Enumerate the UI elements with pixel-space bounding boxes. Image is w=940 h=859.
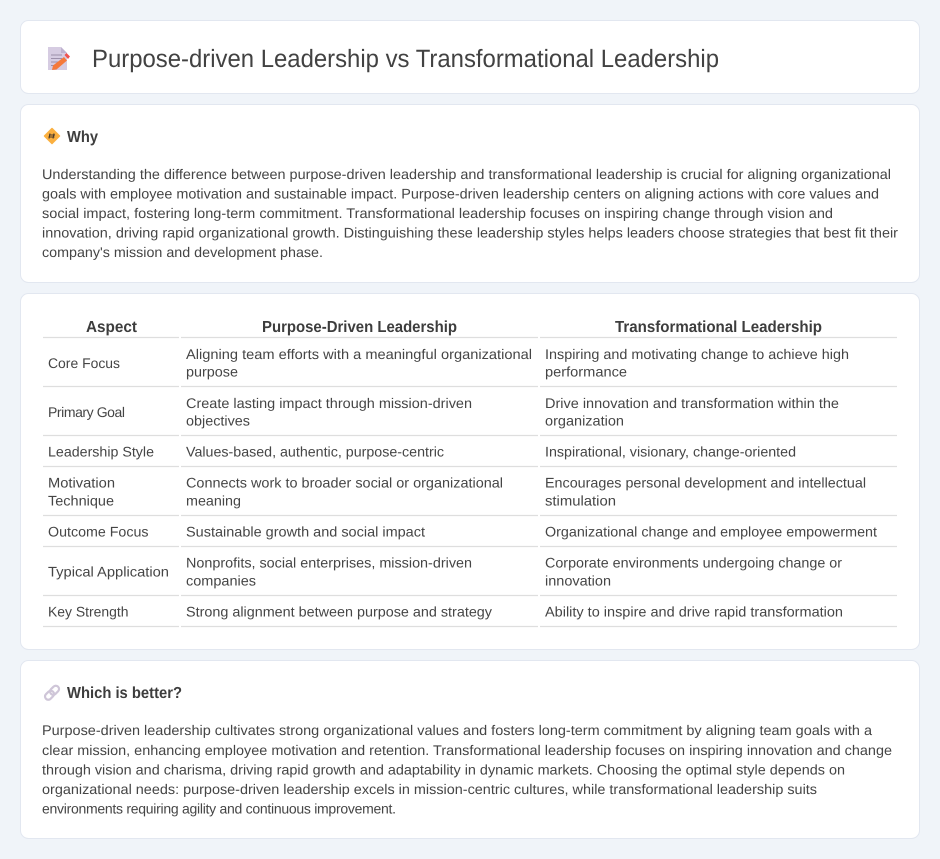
text block: why paragraph xyxy=(42,166,898,260)
row: leadership style: Leadership Style xyxy=(48,444,154,460)
icon: document with pencil xyxy=(48,47,70,70)
text block: which is better paragraph: environments requiring agility and continuous improvement. xyxy=(42,800,396,816)
text block: why paragraph: social impact, fostering long-term commitment. Transformational leadership focuses on inspiring change through vision and xyxy=(42,205,833,221)
row: motivation technique: Motivation xyxy=(48,475,115,491)
text block: which is better paragraph: Purpose-driven leadership cultivates strong organizational values and fosters long-term commitment by aligning team goals with a xyxy=(42,722,872,738)
panel: which is better xyxy=(20,660,920,838)
text block: why paragraph: company's mission and development phase. xyxy=(42,244,323,260)
row: typical application: Nonprofits, social enterprises, mission-driven xyxy=(186,555,472,571)
row: core focus: Aligning team efforts with a meaningful organizational xyxy=(186,346,532,362)
row: key strength: Strong alignment between purpose and strategy xyxy=(186,604,492,620)
text block: why paragraph: innovation, driving rapid organizational growth. Distinguishing these leadership styles helps leaders choose strategies that best fit their xyxy=(42,224,898,240)
row: typical application: innovation xyxy=(545,572,611,588)
row: primary goal: organization xyxy=(545,413,624,429)
text block: which is better paragraph: through vision and charisma, driving rapid growth and adaptability in dynamic markets. Choosing the optimal style depends on xyxy=(42,762,845,778)
row: typical application xyxy=(43,555,897,596)
panel: header xyxy=(20,20,920,94)
text block: why paragraph: Understanding the difference between purpose-driven leadership and transformational leadership is crucial for aligning organizational xyxy=(42,166,891,182)
icon: chain link xyxy=(44,684,60,701)
title: Purpose-driven Leadership vs Transformational Leadership xyxy=(92,45,719,73)
row: key strength: Key Strength xyxy=(48,604,128,620)
row: core focus: Inspiring and motivating change to achieve high xyxy=(545,346,849,362)
row: motivation technique: stimulation xyxy=(545,492,616,508)
table header row xyxy=(43,319,897,338)
row: motivation technique: Technique xyxy=(48,492,114,508)
row: outcome focus: Outcome Focus xyxy=(48,524,148,540)
text block: which is better paragraph xyxy=(42,722,892,816)
icon: orange diamond sign xyxy=(44,128,60,144)
row: leadership style: Values-based, authentic, purpose-centric xyxy=(186,444,444,460)
text block: which is better paragraph: organizational needs: purpose-driven leadership excels in mission-centric cultures, while transformational leadership suits xyxy=(42,781,817,797)
row: outcome focus: Sustainable growth and social impact xyxy=(186,524,425,540)
table header row: Aspect xyxy=(86,319,138,336)
row: motivation technique: Encourages personal development and intellectual xyxy=(545,475,866,491)
row: typical application: Corporate environments undergoing change or xyxy=(545,555,842,571)
row: primary goal: Create lasting impact through mission-driven xyxy=(186,395,472,411)
row: leadership style: Inspirational, visionary, change-oriented xyxy=(545,444,796,460)
heading: which is better: Which is better? xyxy=(67,685,182,702)
panel: comparison table xyxy=(20,294,920,650)
row: primary goal xyxy=(43,395,897,436)
row: key strength: Ability to inspire and drive rapid transformation xyxy=(545,604,843,620)
table header row: Purpose-Driven Leadership xyxy=(262,319,457,336)
row: key strength xyxy=(43,604,897,626)
heading: why: Why xyxy=(67,129,98,146)
row: primary goal: Drive innovation and transformation within the xyxy=(545,395,839,411)
row: leadership style xyxy=(43,444,897,466)
row: core focus: Core Focus xyxy=(48,355,120,371)
row: primary goal: Primary Goal xyxy=(48,404,125,420)
row: outcome focus: Organizational change and employee empowerment xyxy=(545,524,877,540)
row: motivation technique: meaning xyxy=(186,492,241,508)
text block: which is better paragraph: clear mission, enhancing employee motivation and retention. Transformational leadership focuses on inspiring innovation and change xyxy=(42,742,892,758)
row: motivation technique: Connects work to broader social or organizational xyxy=(186,475,503,491)
row: core focus xyxy=(43,346,897,386)
table header row: Transformational Leadership xyxy=(615,319,822,336)
row: core focus: performance xyxy=(545,364,627,380)
row: outcome focus xyxy=(43,524,897,546)
row: typical application: Typical Application xyxy=(48,564,169,580)
row: core focus: purpose xyxy=(186,364,238,380)
row: primary goal: objectives xyxy=(186,413,250,429)
row: typical application: companies xyxy=(186,572,256,588)
panel: why xyxy=(20,104,920,282)
text block: why paragraph: goals with employee motivation and sustainable impact. Purpose-driven leadership centers on aligning actions with core values and xyxy=(42,186,879,202)
row: motivation technique xyxy=(43,475,897,516)
